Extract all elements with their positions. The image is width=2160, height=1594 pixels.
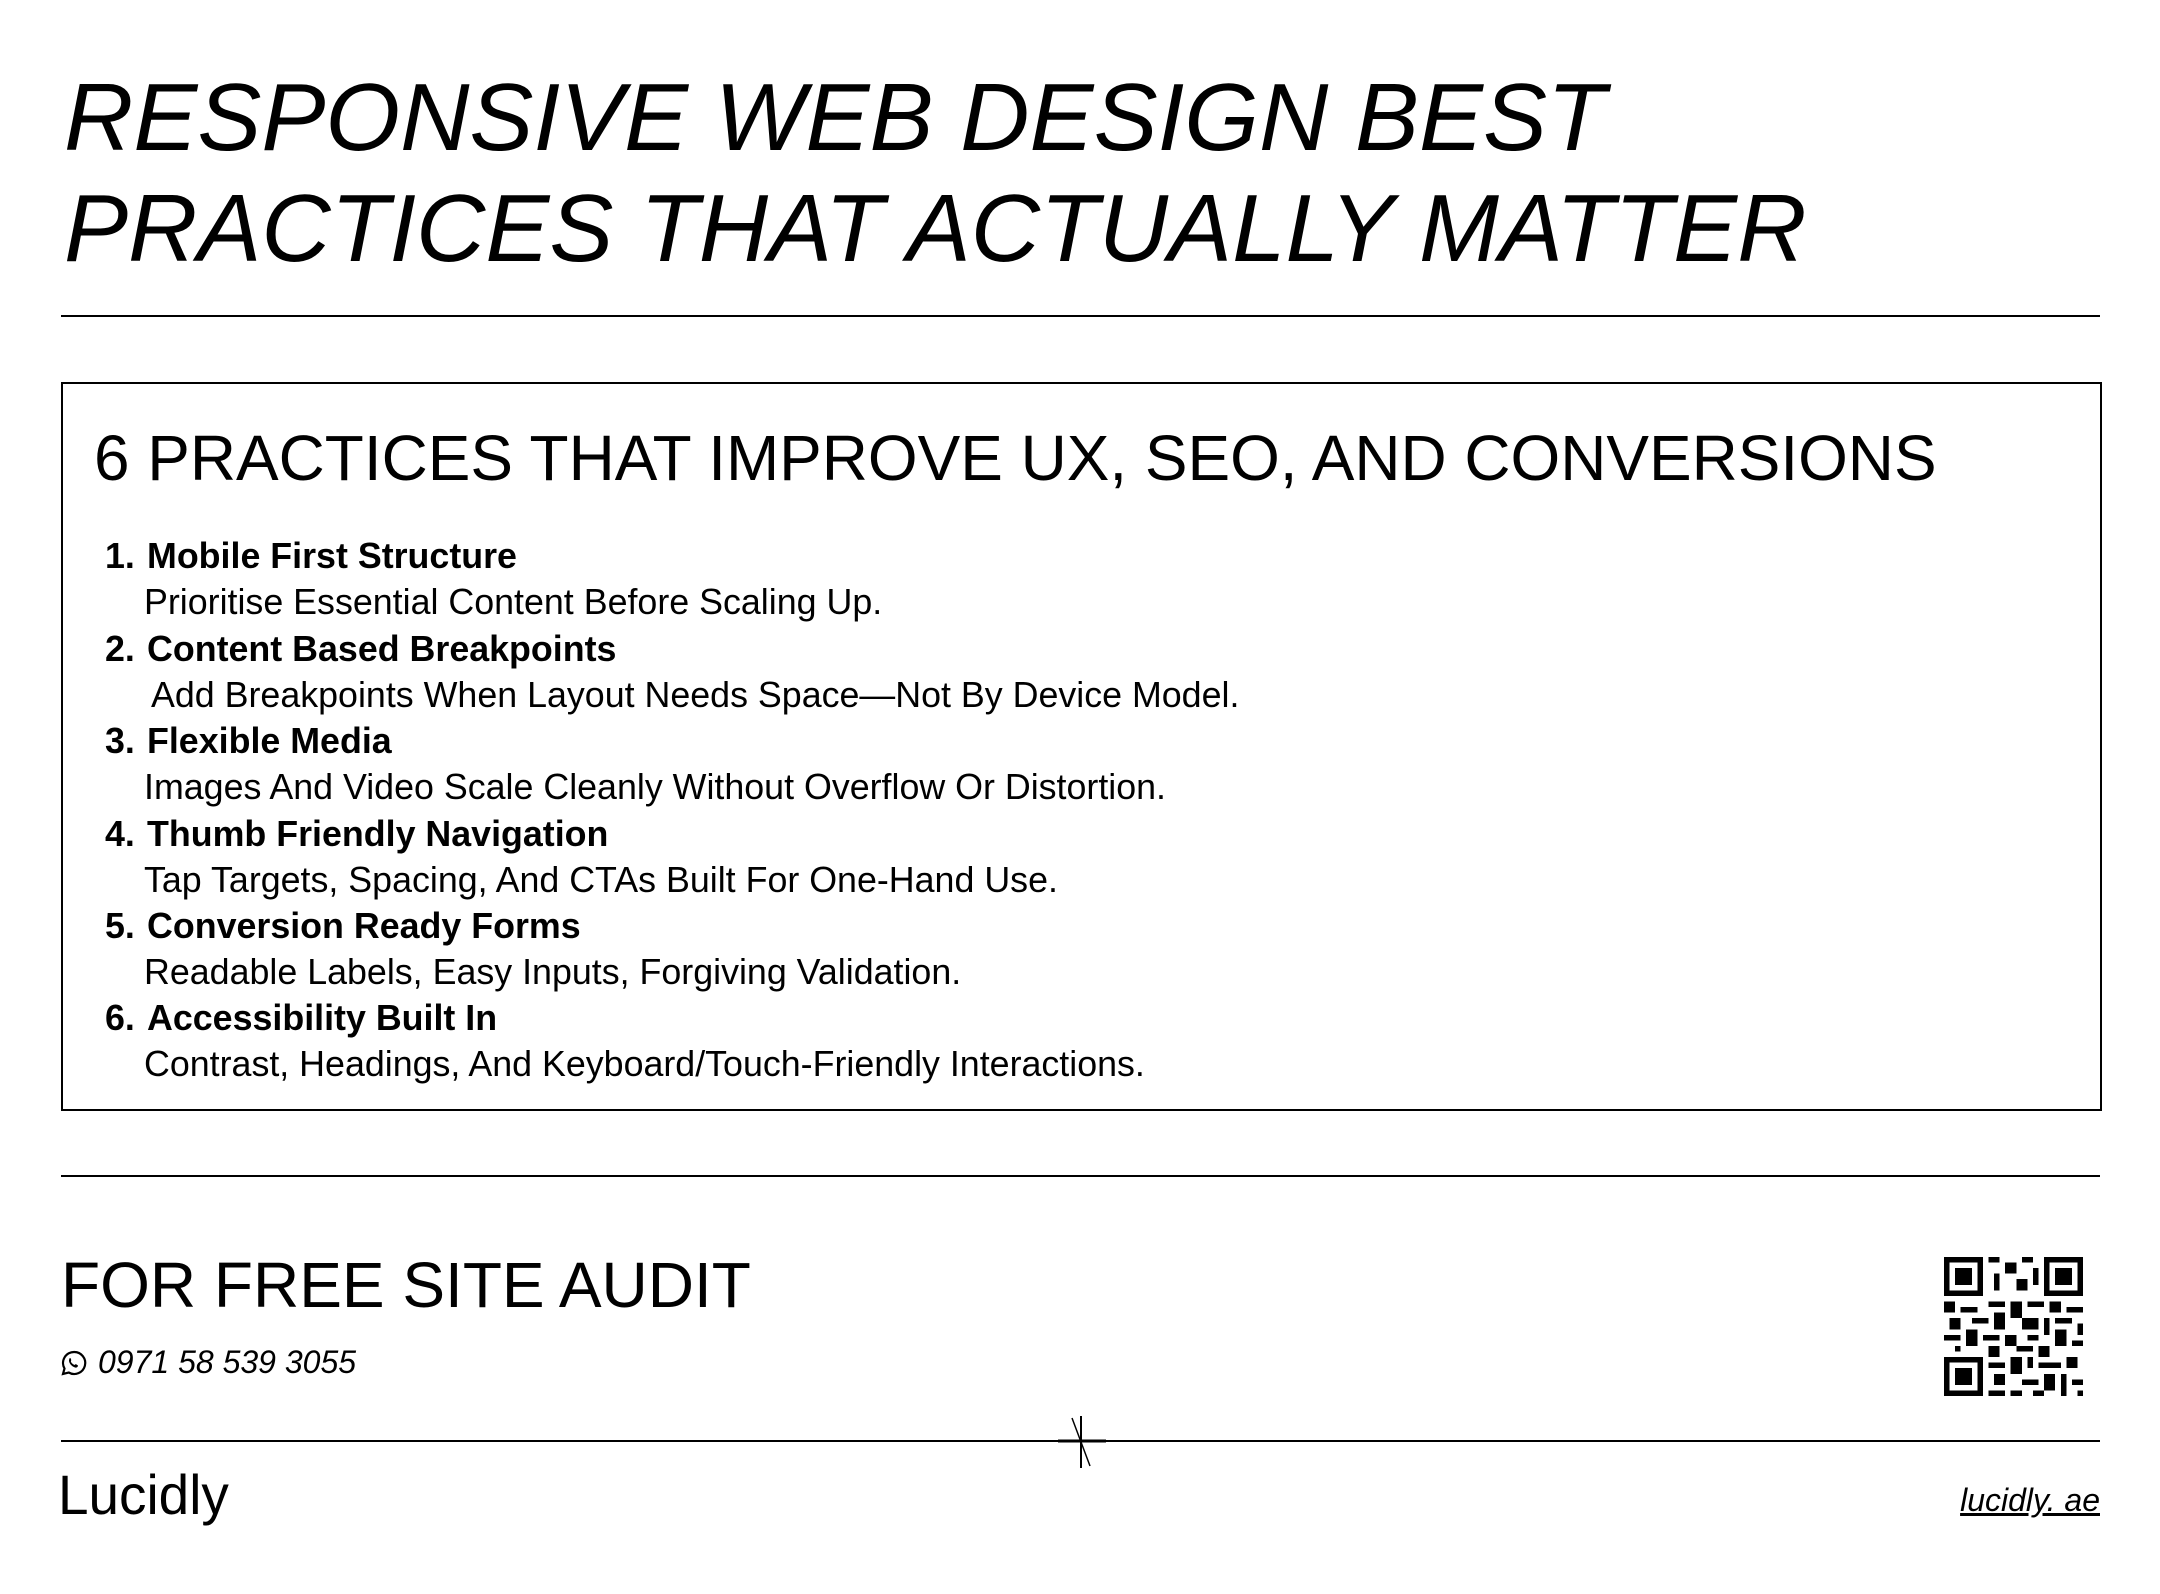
item 2: Content Based Breakpoints — [147, 629, 616, 669]
website link: lucidly. ae — [1960, 1482, 2100, 1518]
icon: whatsapp — [61, 1350, 86, 1376]
item 6: Accessibility Built In — [147, 998, 497, 1038]
item 6: 6. — [105, 998, 135, 1038]
item 5: Readable Labels, Easy Inputs, Forgiving Validation. — [144, 952, 961, 992]
item 5: 5. — [105, 906, 135, 946]
title: RESPONSIVE WEB DESIGN BEST — [64, 64, 1606, 171]
item 3: Flexible Media — [147, 721, 392, 761]
title: PRACTICES THAT ACTUALLY MATTER — [64, 175, 1807, 282]
QR code — [1944, 1257, 2083, 1396]
item 3: 3. — [105, 721, 135, 761]
title — [64, 64, 1807, 282]
item 2: Add Breakpoints When Layout Needs Space—Not By Device Model. — [151, 675, 1239, 715]
item 4: 4. — [105, 814, 135, 854]
item 6: Contrast, Headings, And Keyboard/Touch-Friendly Interactions. — [144, 1044, 1145, 1084]
item 5: Conversion Ready Forms — [147, 906, 581, 946]
item 2: 2. — [105, 629, 135, 669]
item 1: Prioritise Essential Content Before Scaling Up. — [144, 582, 882, 622]
item 4: Thumb Friendly Navigation — [147, 814, 608, 854]
item 4: Tap Targets, Spacing, And CTAs Built For One-Hand Use. — [144, 860, 1058, 900]
item 1: Mobile First Structure — [147, 536, 517, 576]
phone contact: 0971 58 539 3055 — [98, 1344, 356, 1380]
item 6 — [105, 998, 1145, 1084]
item 4 — [105, 814, 1058, 900]
item 2 — [105, 629, 1239, 715]
icon: crosshair mark — [1058, 1416, 1106, 1468]
CTA heading: FOR FREE SITE AUDIT — [61, 1249, 751, 1321]
logo: Lucidly: Lucidly — [58, 1463, 229, 1526]
item 5 — [105, 906, 961, 992]
item 1: 1. — [105, 536, 135, 576]
item 1 — [105, 536, 882, 622]
panel: practices — [61, 382, 2102, 1111]
item 3 — [105, 721, 1166, 807]
panel heading: 6 PRACTICES THAT IMPROVE UX, SEO, AND CONVERSIONS — [94, 422, 1937, 494]
item 3: Images And Video Scale Cleanly Without Overflow Or Distortion. — [144, 767, 1166, 807]
